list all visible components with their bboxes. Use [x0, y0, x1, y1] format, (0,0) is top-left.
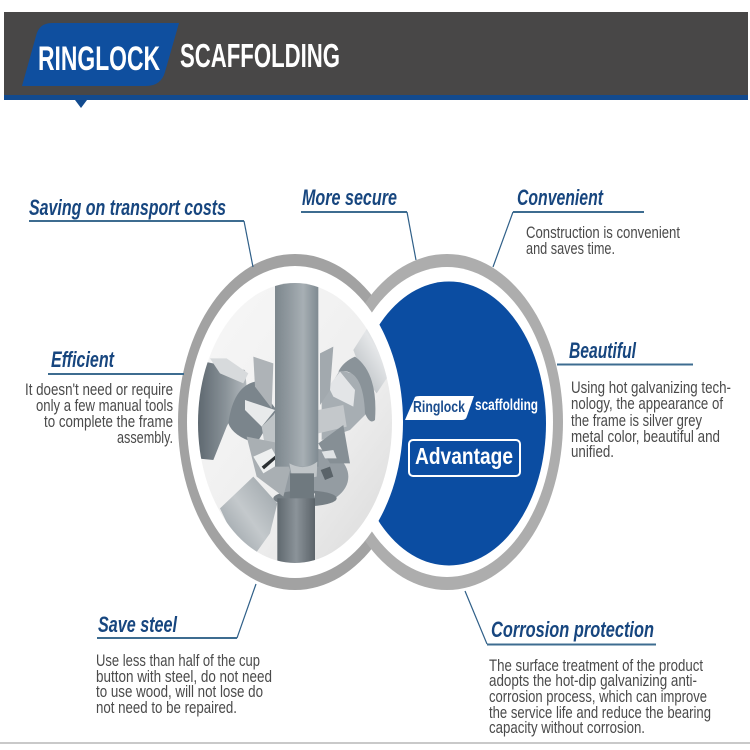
callout: save steel	[96, 584, 272, 717]
callout: save steel: button with steel, do not need	[96, 667, 272, 686]
panel: advantage blue circle	[187, 266, 546, 578]
title badge: ringlock	[22, 23, 179, 86]
callout: corrosion protection: adopts the hot-dip galvanizing anti-	[489, 671, 697, 690]
callout: efficient	[25, 347, 184, 447]
central double ring	[178, 254, 563, 590]
logo text: scaffolding: scaffolding	[475, 397, 538, 414]
photo: ringlock scaffold joint	[198, 283, 392, 563]
callout: more secure: More secure	[302, 185, 397, 210]
callout: corrosion protection: capacity without corrosion.	[489, 718, 645, 737]
icon: vertical pole	[275, 277, 318, 575]
callout: corrosion protection	[465, 591, 711, 737]
callout: efficient: only a few manual tools	[36, 396, 173, 415]
callout: convenient	[493, 185, 680, 267]
advantage label: Advantage	[415, 443, 513, 469]
callout: convenient: Construction is convenient	[526, 223, 680, 242]
callout: beautiful: unified.	[571, 442, 614, 461]
callout: convenient: Convenient	[517, 185, 604, 210]
icon: lower left tube	[220, 477, 277, 557]
callout: save steel: to use wood, will not lose do	[96, 682, 263, 701]
advantage label	[409, 440, 520, 476]
header banner	[4, 12, 748, 108]
callout: more secure	[301, 185, 416, 260]
callout: corrosion protection: Corrosion protection	[491, 617, 654, 642]
title badge: ringlock: RINGLOCK	[38, 40, 160, 78]
logo badge: ringlock	[405, 396, 474, 420]
callout: efficient: It doesn't need or require	[25, 380, 173, 399]
callout: efficient: assembly.	[117, 428, 173, 447]
callout: saving on transport costs: Saving on transport costs	[29, 195, 226, 220]
logo badge: ringlock: Ringlock	[413, 399, 465, 416]
callout: beautiful	[557, 338, 731, 461]
callout: save steel: not need to be repaired.	[96, 698, 237, 717]
callout: beautiful: the frame is silver grey	[571, 411, 702, 430]
callout: save steel: Use less than half of the cup	[96, 651, 260, 670]
callout: efficient: Efficient	[51, 347, 115, 372]
icon: upper left tube	[197, 357, 281, 460]
callout: save steel: Save steel	[98, 612, 178, 637]
callout: convenient: and saves time.	[526, 239, 615, 258]
callout: beautiful: Beautiful	[569, 338, 637, 363]
title: scaffolding: SCAFFOLDING	[180, 37, 340, 74]
callout: efficient: to complete the frame	[44, 412, 173, 431]
icon: upper right tube	[318, 329, 387, 440]
icon: rosette ring	[247, 425, 350, 506]
callout: saving on transport costs	[29, 195, 253, 267]
